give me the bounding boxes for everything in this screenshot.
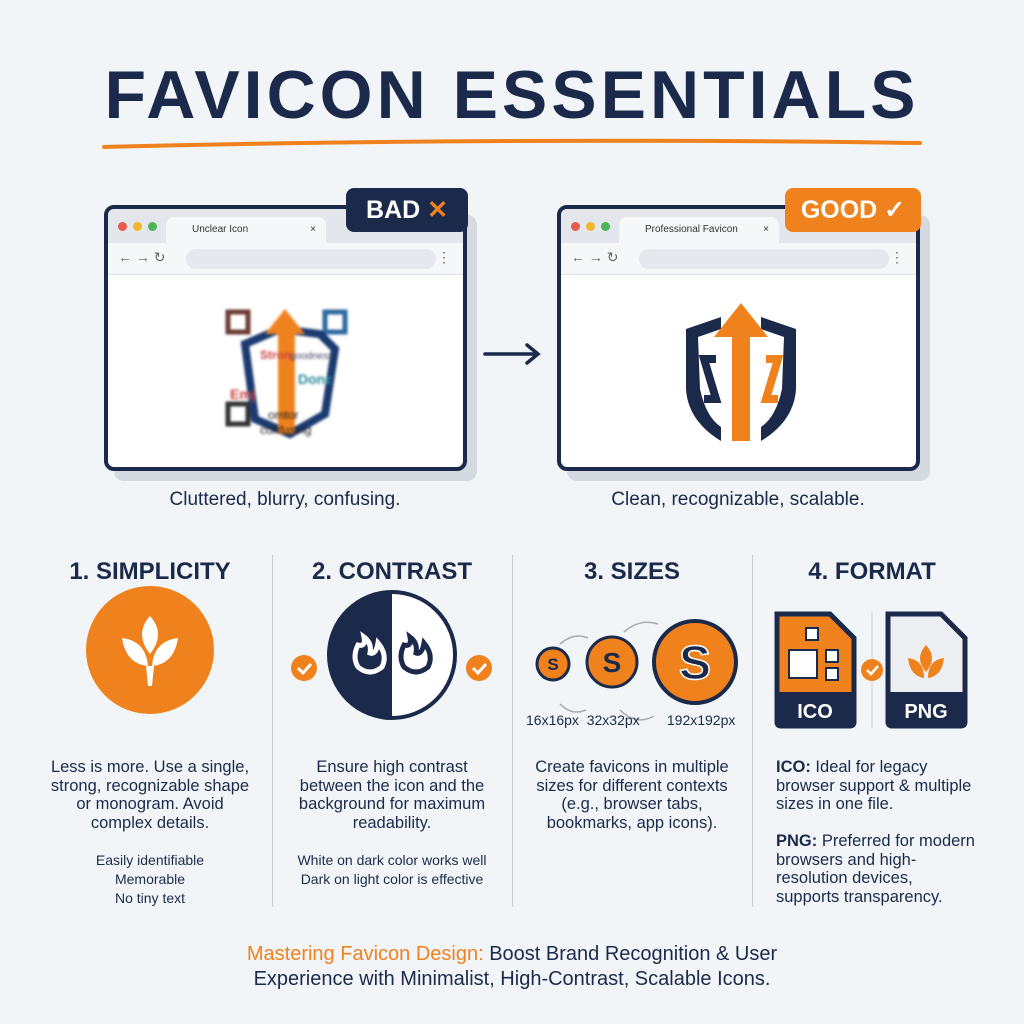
size labels: 16x16px 32x32px 192x192px <box>526 712 735 728</box>
panel: good browser: ← → ↻ <box>571 249 619 265</box>
icon: size circles: S <box>679 637 711 690</box>
icon: cluttered favicon: omtor <box>268 408 299 422</box>
arrow <box>483 343 541 365</box>
badge: good: GOOD ✓ <box>801 196 905 224</box>
panel: simplicity: Memorable <box>115 871 185 887</box>
icon: cluttered favicon <box>224 308 350 440</box>
panel: contrast: Dark on light color is effective <box>301 871 483 887</box>
panel: sizes: Create favicons in multiple sizes for different contexts (e.g., browser tabs, bookmarks, app icons). <box>535 758 729 832</box>
text: Less is more. Use a single, strong, recognizable shape or monogram. Avoid complex details. <box>51 758 249 832</box>
panel: sizes <box>526 558 738 832</box>
panel: simplicity <box>51 558 249 906</box>
icon: size circles: S <box>547 655 559 674</box>
panel: good browser: Professional Favicon <box>645 224 738 235</box>
icon: contrast circle <box>291 590 492 720</box>
panel: bad browser: × <box>310 224 316 235</box>
panel: contrast <box>291 558 492 887</box>
icon: file formats: ICO <box>797 701 833 723</box>
icon: cluttered favicon: Stron <box>260 348 291 362</box>
panel: bad browser: ⋮ <box>437 249 451 265</box>
panel: simplicity: No tiny text <box>115 890 185 906</box>
footer <box>247 943 777 990</box>
badge: good <box>785 188 921 232</box>
badge: bad <box>346 188 468 232</box>
icon: size circles: S <box>603 647 621 678</box>
panel: format <box>774 558 975 906</box>
panel: format: 4. FORMAT <box>808 558 936 585</box>
panel: bad browser: Unclear Icon <box>192 224 248 235</box>
icon: cluttered favicon: Donz <box>298 371 332 387</box>
footer: Experience with Minimalist, High-Contrast, Scalable Icons. <box>254 968 770 990</box>
panel: good browser: ⋮ <box>890 249 904 265</box>
icon: size circles <box>536 619 738 721</box>
footer: Mastering Favicon Design: Boost Brand Recognition & User <box>247 943 777 965</box>
icon: file formats: PNG <box>904 701 948 723</box>
title underline <box>102 138 922 149</box>
panel: bad browser: ← → ↻ <box>118 249 166 265</box>
caption: good: Clean, recognizable, scalable. <box>611 489 865 510</box>
caption: bad: Cluttered, blurry, confusing. <box>170 489 400 510</box>
icon: file formats <box>774 612 968 728</box>
heading: 1. SIMPLICITY <box>69 558 231 585</box>
panel: simplicity: Easily identifiable <box>96 852 204 868</box>
icon: cluttered favicon: Emj <box>230 386 256 402</box>
panel: contrast: 2. CONTRAST <box>312 558 472 585</box>
icon: cluttered favicon: confusing <box>260 423 311 437</box>
text: PNG: Preferred for modern browsers and high-resolution devices, supports transparency. <box>776 832 975 906</box>
icon: cluttered favicon: goodness <box>290 351 333 362</box>
badge: bad: BAD ✕ <box>366 196 448 224</box>
panel: sizes: 3. SIZES <box>584 558 680 585</box>
panel: good browser <box>557 205 920 471</box>
text <box>776 758 975 906</box>
icon: leaf circle <box>86 586 214 714</box>
title: FAVICON ESSENTIALS <box>104 57 920 133</box>
panel: contrast: White on dark color works well <box>297 852 487 868</box>
icon: clean shield favicon <box>686 303 796 441</box>
panel: contrast: Ensure high contrast between the icon and the background for maximum readability. <box>299 758 485 832</box>
panel: bad browser <box>104 205 467 471</box>
panel: good browser: × <box>763 224 769 235</box>
text: ICO: Ideal for legacy browser support & multiple sizes in one file. <box>776 758 971 813</box>
